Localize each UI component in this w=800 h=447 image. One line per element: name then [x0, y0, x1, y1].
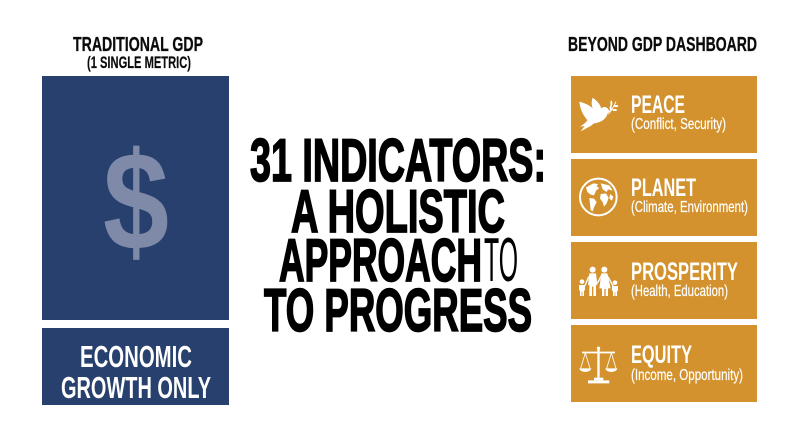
panel: prosperity: PROSPERITY [631, 258, 738, 286]
title: APPROACH [279, 227, 482, 294]
title: TO [484, 226, 518, 295]
icon: scales of justice [579, 347, 617, 383]
panel: economic growth only: GROWTH ONLY [61, 370, 211, 405]
icon: dove [579, 98, 618, 131]
title: TO PROGRESS [264, 277, 532, 344]
title [250, 127, 546, 344]
panel: prosperity [571, 242, 757, 319]
panel: peace [571, 76, 757, 153]
panel: planet: (Climate, Environment) [631, 199, 748, 216]
panel: equity: EQUITY [631, 341, 692, 369]
panel: equity [571, 325, 757, 402]
panel: peace: (Conflict, Security) [631, 116, 726, 133]
icon: dollar sign: $ [103, 122, 169, 280]
panel: equity: (Income, Opportunity) [631, 367, 743, 384]
panel: planet: PLANET [631, 174, 696, 202]
title: 31 INDICATORS: [250, 127, 546, 194]
panel: economic growth only [42, 328, 229, 405]
panel: economic growth only: ECONOMIC [80, 339, 192, 374]
left heading: TRADITIONAL GDP [73, 34, 203, 56]
panel: dollar metric [42, 76, 229, 320]
icon: globe [580, 179, 617, 215]
title: A HOLISTIC [291, 178, 505, 245]
panel: peace: PEACE [631, 91, 685, 119]
right column: beyond GDP dashboard [568, 34, 757, 402]
left subheading: (1 SINGLE METRIC) [87, 54, 191, 72]
icon: family [579, 267, 618, 296]
panel: planet [571, 159, 757, 236]
left column: traditional GDP [42, 34, 229, 405]
panel: prosperity: (Health, Education) [631, 283, 728, 300]
